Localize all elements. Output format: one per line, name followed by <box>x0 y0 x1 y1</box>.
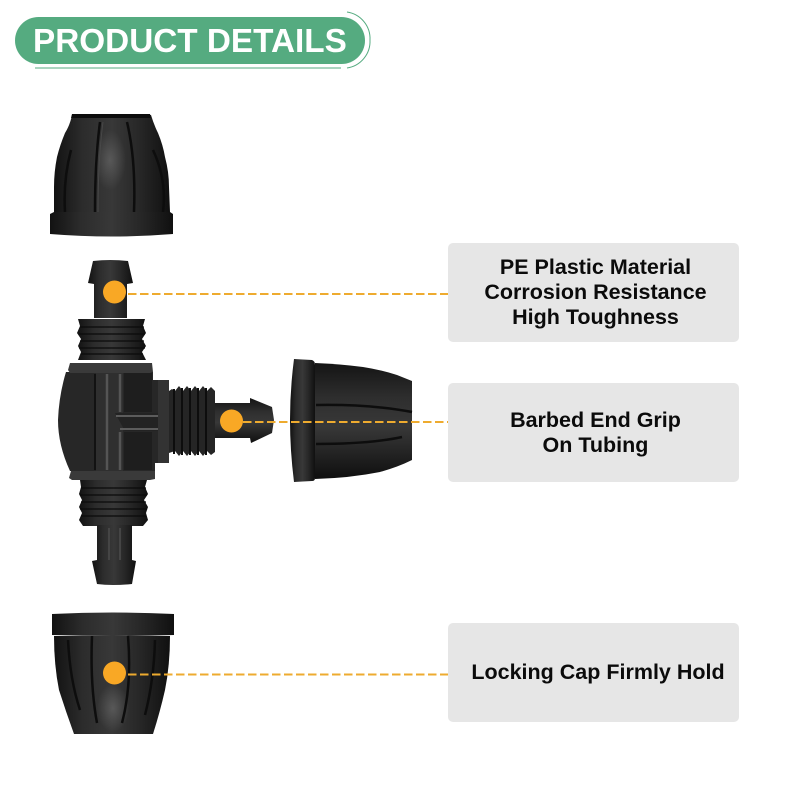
text card: barbed end: On Tubing <box>543 432 648 456</box>
text card: locking cap <box>448 623 739 722</box>
title badge: PRODUCT DETAILS <box>33 23 347 60</box>
title badge <box>15 12 370 68</box>
bottom barb <box>92 525 136 585</box>
tee flanges <box>68 363 153 373</box>
side barb <box>215 398 274 443</box>
text card: barbed end: Barbed End Grip <box>510 408 681 432</box>
top thread <box>77 319 146 360</box>
text card: material: High Toughness <box>512 305 679 329</box>
callout line: material <box>103 280 449 304</box>
text card: material: Corrosion Resistance <box>484 280 707 304</box>
text card: material <box>448 243 739 342</box>
right locking cap <box>290 359 412 482</box>
top barb <box>88 260 133 318</box>
text card: locking cap: Locking Cap Firmly Hold <box>471 660 725 684</box>
text card: material: PE Plastic Material <box>500 255 691 279</box>
tee body <box>58 372 169 471</box>
bottom thread <box>79 480 148 526</box>
callout line: locking cap <box>103 662 449 684</box>
top locking cap <box>50 114 173 236</box>
bottom locking cap <box>52 612 174 734</box>
side thread <box>169 386 215 456</box>
callout line: barbed end <box>220 410 449 432</box>
tee fitting <box>58 260 274 585</box>
text card: barbed end <box>448 383 739 482</box>
